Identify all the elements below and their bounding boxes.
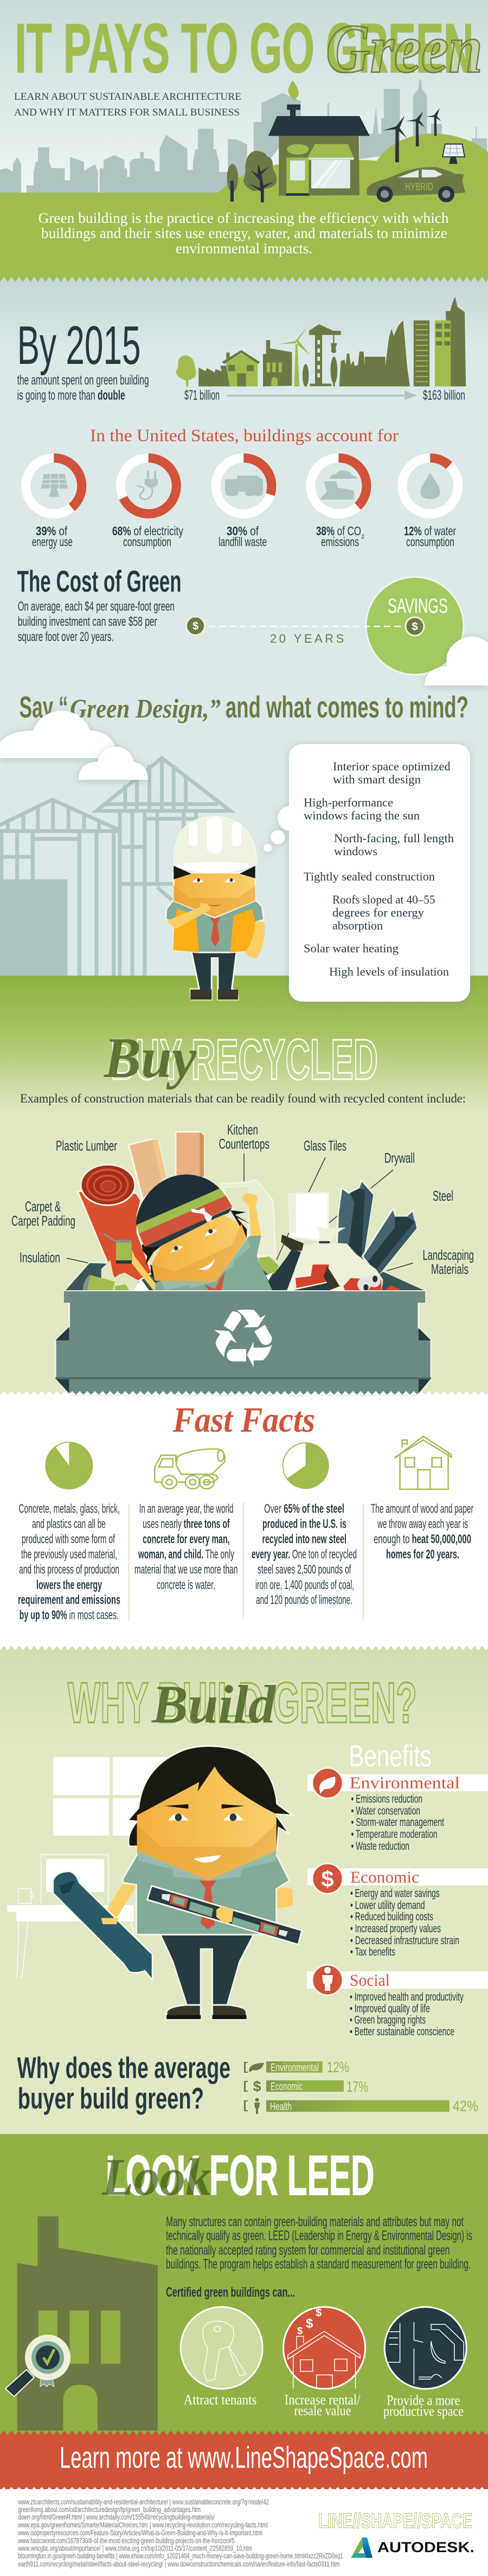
references: greenliving.about.com/od/architecturedesign/tp/green_building_advantages.htm (18, 2505, 201, 2514)
say green design heading: Say “ (20, 690, 68, 724)
references: doerr.org/html/GreenR.html | www.archdaily.com/155549/recyclingbuilding-materials/ (18, 2513, 215, 2521)
cans and bag (83, 1233, 156, 1292)
icon: cement truck (155, 1449, 225, 1489)
shirt (123, 1855, 290, 1934)
cost of green heading: The Cost of Green (17, 564, 182, 598)
donut labels (32, 524, 456, 549)
glass tile (289, 1193, 328, 1242)
icon: person (322, 1967, 333, 1991)
circle labels: Provide a more (387, 2393, 460, 2408)
benefit: economic: $ (321, 1866, 334, 1892)
benefit: environmental: • Temperature moderation (351, 1828, 437, 1841)
steel beams (337, 1181, 416, 1276)
donut: co2 (311, 458, 367, 514)
pie: 90 percent (45, 1441, 93, 1489)
dumpster (55, 1291, 431, 1395)
thought bubble panel (264, 744, 470, 1002)
donut: electricity (120, 458, 176, 514)
circle labels: Increase rental/ (285, 2392, 361, 2408)
cloud: right (425, 637, 488, 685)
benefit: economic: • Energy and water savings (350, 1887, 439, 1900)
references: www.ztcarchitects.com/sustainability-and-residential-architecture/ | www.sustainableconcrete.org/?q=node/42 (18, 2497, 269, 2506)
plastic lumber (129, 1132, 204, 1200)
bar chart: 42% (453, 2098, 478, 2114)
circle: rental value: $ (316, 2307, 322, 2319)
pants and shoes (160, 1934, 254, 2019)
benefit: environmental: Environmental (350, 1773, 460, 1792)
references (18, 2497, 343, 2568)
growing city skyline (176, 297, 466, 387)
intro text (38, 210, 449, 257)
list of design features: windows (334, 844, 377, 858)
savings circle: SAVINGS (388, 595, 448, 618)
circle labels: Attract tenants (184, 2392, 257, 2408)
benefit: environmental (307, 1768, 488, 1853)
bar chart: 12% (327, 2059, 349, 2075)
fact 2: uses nearly three tons of (143, 1516, 230, 1530)
trees (227, 151, 277, 202)
green scraps (259, 1257, 278, 1281)
icon: blueprint (388, 2322, 464, 2385)
icon: person small (254, 2098, 260, 2114)
bar chart: Health (270, 2101, 292, 2113)
cost of green body: building investment can save $58 per (18, 614, 157, 629)
icon: brackets (244, 2062, 248, 2111)
fact 4 (371, 1501, 473, 1561)
why average buyer heading: Why does the average (17, 2051, 230, 2085)
intro text: Green building is the practice of increasing the efficiency with which (38, 210, 449, 226)
spirit level (147, 1886, 302, 1945)
solar panel on hill (442, 144, 465, 164)
references: www.fastcoexist.com/1678730/8-of-the-most-exciting-green-building-projects-on-the-horizon#5 (18, 2536, 235, 2545)
spending arrow: $71 billion (184, 388, 220, 403)
leader lines (67, 1154, 413, 1271)
green hills (218, 133, 488, 199)
arms (95, 1883, 293, 1941)
blueprint roll (53, 1872, 152, 1980)
donut labels: emissions (321, 535, 359, 549)
circle labels: resale value (294, 2402, 351, 2419)
references: www.isopropertyresources.com/Feature-Story/Articles/What-Is-Green-Building-and-Why-Is-It-Important.html (18, 2528, 262, 2537)
fact 3 (252, 1501, 357, 1607)
fact 2: concrete is water. (157, 1578, 215, 1592)
spending arrow (184, 388, 465, 403)
cost of green body: square foot over 20 years. (18, 630, 114, 644)
benefit: economic: • Reduced building costs (350, 1910, 433, 1923)
benefit: social: • Improved quality of life (350, 2002, 430, 2015)
why average buyer heading (17, 2051, 230, 2115)
fact 3: produced in the U.S. is (262, 1516, 346, 1530)
material labels: Carpet Padding (11, 1213, 75, 1229)
fact 1: requirement and emissions (18, 1593, 120, 1607)
material labels: Countertops (219, 1136, 269, 1152)
benefit: economic: • Increased property values (350, 1922, 441, 1935)
donut labels: consumption (406, 535, 454, 549)
recycled materials right (221, 1180, 425, 1292)
logo: autodesk (351, 2537, 474, 2558)
dumpster interior (64, 1263, 425, 1291)
script: Buy: Buy (104, 1026, 197, 1090)
icon: plug (137, 471, 158, 499)
leed body (166, 2214, 472, 2272)
benefit: environmental: • Emissions reduction (351, 1792, 422, 1805)
fact 1: and this process of production (19, 1562, 119, 1576)
leed building (17, 2216, 158, 2431)
benefits heading: Benefits (349, 1739, 432, 1773)
list of design features: windows facing the sun (304, 809, 420, 822)
material labels: Carpet & (25, 1199, 61, 1215)
fact 1: by up to 90% in most cases. (20, 1608, 119, 1622)
benefit: economic: Economic (350, 1868, 419, 1887)
grass band edge (0, 976, 488, 977)
say green design heading (20, 690, 468, 724)
material labels: Kitchen (227, 1122, 258, 1138)
subtitle (14, 91, 241, 118)
references: bloomington.in.gov/green-building-benefits | www.ehow.com/info_12021494_much-money-can-save-building-green-home.html#ixzz2RxZD0xq1 (18, 2552, 343, 2560)
carpet (78, 1165, 152, 1281)
script: Build: Build (151, 1674, 277, 1734)
donut labels: 12% of water (404, 524, 456, 538)
intro text: environmental impacts. (176, 240, 312, 257)
fact 3: Over 65% of the steel (264, 1501, 344, 1515)
circle: rental value: $ (297, 2325, 303, 2336)
icon: solar panel (41, 474, 68, 497)
material labels: Drywall (384, 1150, 415, 1166)
house (268, 80, 370, 196)
donut labels: consumption (123, 535, 171, 549)
circle: productive space (384, 2307, 466, 2389)
leaf (288, 80, 299, 101)
material labels (11, 1122, 474, 1277)
list of design features: Roofs sloped at 40–55 (332, 893, 435, 906)
material labels: Plastic Lumber (56, 1138, 117, 1154)
fast facts heading: Fast Facts (172, 1400, 315, 1440)
trash bag (286, 1227, 383, 1292)
icon: leaf (319, 1777, 336, 1794)
list of design features (304, 759, 454, 978)
savings circle (366, 577, 464, 675)
list of design features: with smart design (333, 773, 421, 786)
office background (7, 1757, 168, 1978)
character: worker (165, 816, 265, 999)
background skyline (0, 80, 487, 193)
why average buyer heading: buyer build green? (18, 2081, 204, 2115)
benefit: social (307, 1965, 488, 2038)
script: Look: Look (101, 2148, 211, 2207)
character: recycler (83, 1175, 273, 1292)
house frames (0, 758, 230, 976)
fact 1: the previously used material, (21, 1547, 117, 1561)
recycled materials left (78, 1132, 204, 1281)
icon: recycling symbol (214, 1310, 272, 1367)
shoe (324, 1266, 340, 1290)
references: earth911.com/recycling/metal/steel/facts-about-steel-recycling/ | www.dowconstructionchemicals.com/na/en/feature-info/fast-facts0311.htm (18, 2559, 339, 2568)
icon: house and dollars (288, 2331, 360, 2389)
fact 3: every year. One ton of recycled (252, 1547, 357, 1561)
savings timeline: 20 YEARS (270, 632, 346, 645)
list of design features: absorption (332, 919, 383, 932)
hands (216, 1906, 233, 1923)
circle: rental value: $ (306, 2316, 313, 2331)
icon: magnifier badge (5, 2335, 70, 2396)
hybrid car (367, 167, 465, 202)
recycled intro: Examples of construction materials that can be readily found with recycled content include: (20, 1092, 466, 1105)
cost of green body (18, 599, 175, 644)
crushed cans (343, 1274, 400, 1292)
eyes and smile (170, 1229, 217, 1270)
fact 1: and plastics can all be (32, 1516, 106, 1530)
fact 2: material that we use more than (134, 1562, 237, 1576)
benefit: economic: • Tax benefits (350, 1945, 395, 1958)
icon: truck (225, 476, 263, 496)
benefit: social: Social (350, 1971, 390, 1990)
donut labels: 68% of electricity (112, 524, 183, 538)
donut labels: landfill waste (219, 535, 267, 549)
raised arm (242, 1193, 261, 1235)
fact 3: iron ore, 1,400 pounds of coal, (255, 1578, 354, 1592)
fact 3: and 120 pounds of limestone. (256, 1593, 352, 1607)
footer call to action band (0, 2431, 488, 2491)
fact 1: Concrete, metals, glass, brick, (18, 1501, 120, 1515)
fact 1 (18, 1501, 120, 1622)
subtitle: AND WHY IT MATTERS FOR SMALL BUSINESS (14, 107, 240, 118)
logo: autodesk: AUTODESK. (377, 2539, 474, 2555)
list of design features: Interior space optimized (333, 759, 451, 773)
fact dividers (129, 1502, 363, 1621)
material labels: Insulation (20, 1249, 60, 1266)
by 2015 description: is going to more than double (17, 388, 125, 403)
character: builder (53, 1746, 302, 2019)
hair (142, 1210, 251, 1281)
list of design features: North-facing, full length (334, 831, 454, 845)
donut: landfill (216, 458, 272, 514)
donut labels: 39% of (36, 524, 67, 538)
material labels: Materials (431, 1261, 468, 1277)
fact 3: recycled into new steel (262, 1532, 346, 1546)
icon: leaf small (249, 2063, 264, 2072)
donut labels: 2 (361, 534, 364, 540)
circle: rental value (283, 2307, 365, 2389)
references: www.wncgbc.org/about/importance/ | www.china.org.cn/top10/2011-05/17/content_22582859_10.htm (18, 2543, 252, 2552)
references: www.epa.gov/greenhomes/SmarterMaterialChoices.htm | www.recycling-revolution.com/recycling-facts.html (18, 2521, 268, 2529)
coin start (187, 617, 205, 635)
icon: house outline (395, 1436, 451, 1489)
intro text: buildings and their sites use energy, water, and materials to minimize (41, 225, 447, 241)
benefit: environmental: • Water conservation (351, 1804, 420, 1817)
bar chart: $ (253, 2078, 261, 2094)
icon: keys (203, 2321, 246, 2381)
red bricks (296, 1265, 329, 1288)
fact 1: produced with some form of (22, 1532, 115, 1546)
circle labels: productive space (383, 2403, 464, 2419)
material labels: Glass Tiles (304, 1138, 346, 1154)
savings timeline (187, 617, 424, 645)
list of design features: degrees for energy (332, 906, 424, 919)
hybrid car: HYBRID (405, 181, 433, 193)
list of design features: High levels of insulation (329, 965, 449, 978)
interior corner (376, 1272, 425, 1292)
cloud: left small (79, 747, 148, 780)
bar chart: 17% (346, 2078, 368, 2095)
shirt (155, 1235, 273, 1292)
fact 1: lowers the energy (36, 1578, 102, 1592)
benefit: economic (307, 1863, 488, 1958)
cost of green body: On average, each $4 per square-foot green (18, 599, 175, 614)
icon: water drop (421, 472, 440, 499)
donut labels: 38% of CO (316, 524, 361, 538)
list of design features: Solar water heating (304, 941, 399, 955)
fact 2 (134, 1501, 237, 1592)
list of design features: Tightly sealed construction (304, 870, 435, 883)
bar chart: Environmental (271, 2062, 319, 2074)
subtitle: LEARN ABOUT SUSTAINABLE ARCHITECTURE (14, 91, 241, 102)
bandana (136, 1175, 232, 1247)
bar chart (244, 2059, 478, 2114)
face (137, 1766, 277, 1880)
material labels: Steel (433, 1188, 453, 1204)
by 2015 description (17, 373, 149, 403)
coin end: $ (412, 621, 418, 633)
fact 2: woman, and child. The only (138, 1547, 234, 1561)
hair (127, 1746, 293, 1850)
by 2015 heading: By 2015 (17, 315, 141, 376)
fact 2: In an average year, the world (139, 1501, 233, 1515)
donut labels: 30% of (227, 524, 259, 538)
by 2015 description: the amount spent on green building (17, 373, 149, 388)
list of design features: High-performance (304, 796, 393, 809)
benefit: economic: • Lower utility demand (350, 1899, 425, 1912)
face (152, 1216, 247, 1281)
coin end (406, 617, 424, 636)
benefit: environmental: • Waste reduction (351, 1840, 409, 1853)
certified heading: Certified green buildings can... (166, 2285, 295, 2300)
donut labels: energy use (32, 535, 73, 549)
circle labels (184, 2392, 464, 2419)
fact 2: concrete for every man, (143, 1532, 230, 1546)
say green design heading: Green Design,” (70, 693, 221, 723)
bar chart: Economic (271, 2081, 303, 2093)
donut: energy (26, 458, 82, 514)
buildings account heading: In the United States, buildings account for (90, 425, 399, 445)
coin start: $ (192, 620, 198, 632)
fact 3: steel saves 2,500 pounds of (258, 1562, 351, 1576)
countertop (221, 1180, 275, 1257)
pie: 65 percent (283, 1442, 329, 1489)
circle: attract tenants (181, 2307, 262, 2389)
icon: factory cloud (319, 470, 357, 499)
wind turbines (383, 108, 441, 162)
cloud: left large (0, 710, 117, 758)
donut: water (402, 458, 458, 514)
benefit: social: • Green bragging rights (350, 2014, 426, 2027)
legs and shoes (268, 1235, 331, 1292)
